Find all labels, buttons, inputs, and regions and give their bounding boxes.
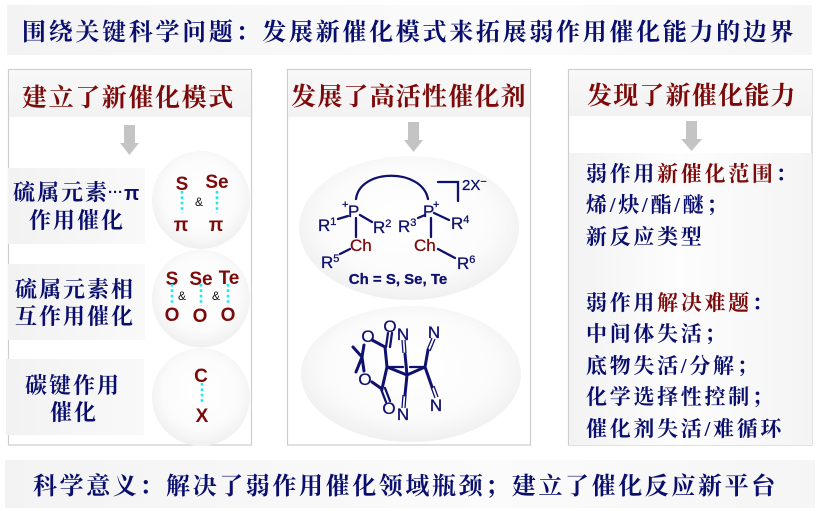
diagram: cyano cyclopropane structure: O <box>382 399 396 418</box>
bottom banner <box>5 460 815 508</box>
row label: chalcogen-pi catalysis: ··· <box>108 184 123 201</box>
text block: capabilities list: 化学选择性控制； <box>586 385 776 409</box>
icon: C X interaction: C <box>194 366 208 387</box>
diagram: phosphonium chalcogenide catalyst: R <box>398 217 410 236</box>
row label: chalcogen-pi catalysis: 作用催化 <box>29 208 125 233</box>
diagram: cyano cyclopropane structure: N <box>428 323 440 342</box>
diagram: cyano cyclopropane structure: N <box>397 405 409 424</box>
row label: chalcogen interaction catalysis <box>8 264 145 340</box>
heading: high activity catalysts <box>288 70 530 117</box>
top banner <box>7 5 812 55</box>
icon: S and Se pi interaction: & <box>195 195 203 209</box>
text block: capabilities list: 新反应类型 <box>586 225 704 249</box>
diagram: phosphonium chalcogenide catalyst: P <box>348 202 359 221</box>
arrow: right panel <box>681 121 702 151</box>
diagram: phosphonium chalcogenide catalyst: 4 <box>463 214 469 226</box>
row label: chalcogen interaction catalysis: 硫属元素相 <box>15 277 135 302</box>
heading: new catalysis modes: 建立了新催化模式 <box>22 84 235 112</box>
text block: capabilities list: 弱作用新催化范围： <box>586 162 799 186</box>
icon: S Se Te O interaction <box>152 250 250 348</box>
panel: new catalytic capabilities <box>568 70 812 445</box>
icon: S and Se pi interaction <box>152 151 250 249</box>
arrow: left panel <box>120 125 139 155</box>
icon: S Se Te O interaction: S <box>166 269 178 290</box>
icon: C X interaction: X <box>196 406 209 427</box>
diagram: phosphonium chalcogenide catalyst <box>299 156 519 300</box>
top banner: 围绕关键科学问题：发展新催化模式来拓展弱作用催化能力的边界 <box>22 18 796 46</box>
icon: S and Se pi interaction: π <box>174 215 189 236</box>
diagram: phosphonium chalcogenide catalyst: 1 <box>330 216 336 228</box>
diagram: cyano cyclopropane structure <box>301 306 521 442</box>
diagram: cyano cyclopropane structure: O <box>361 327 375 346</box>
diagram: cyano cyclopropane structure: O <box>358 370 372 389</box>
icon: S Se Te O interaction: O <box>221 305 235 326</box>
diagram: phosphonium chalcogenide catalyst: Ch = S, Se, Te <box>349 271 447 288</box>
diagram: phosphonium chalcogenide catalyst: R <box>321 253 333 272</box>
diagram: phosphonium chalcogenide catalyst: 3 <box>410 217 416 229</box>
text block: capabilities list: 催化剂失活/难循环 <box>586 417 784 441</box>
heading: new catalytic capabilities <box>569 70 812 116</box>
diagram: phosphonium chalcogenide catalyst: 5 <box>333 253 339 265</box>
text block: capabilities list: 弱作用解决难题： <box>586 291 776 315</box>
panel: high activity catalysts <box>288 70 530 445</box>
text block: capabilities list: 烯/炔/酯/醚； <box>585 193 730 217</box>
row label: carbon bond catalysis: 碳键作用 <box>25 373 121 398</box>
diagram: phosphonium chalcogenide catalyst: + <box>433 199 439 211</box>
diagram: phosphonium chalcogenide catalyst: 6 <box>469 254 475 266</box>
row label: chalcogen interaction catalysis: 互作用催化 <box>15 304 135 329</box>
icon: S and Se pi interaction: Se <box>205 172 229 193</box>
text block: capabilities list <box>569 153 812 445</box>
diagram: phosphonium chalcogenide catalyst: Ch <box>414 236 436 255</box>
text block: capabilities list: 中间体失活； <box>586 322 728 346</box>
icon: S Se Te O interaction: O <box>193 306 207 327</box>
diagram: phosphonium chalcogenide catalyst: Ch <box>350 236 372 255</box>
diagram: phosphonium chalcogenide catalyst: R <box>457 254 469 273</box>
arrow: middle panel <box>404 122 423 152</box>
row label: chalcogen-pi catalysis: π <box>124 183 141 205</box>
icon: S Se Te O interaction: Se <box>189 269 213 290</box>
row label: chalcogen-pi catalysis <box>8 168 145 244</box>
text block: capabilities list: 底物失活/分解； <box>586 354 760 378</box>
panel: new catalysis modes <box>6 70 252 446</box>
row label: carbon bond catalysis: 催化 <box>50 400 98 425</box>
diagram: phosphonium chalcogenide catalyst: R <box>318 216 330 235</box>
row label: chalcogen-pi catalysis: 硫属元素 <box>13 180 109 205</box>
bottom banner: 科学意义：解决了弱作用催化领域瓶颈；建立了催化反应新平台 <box>33 472 778 500</box>
icon: S Se Te O interaction: & <box>178 289 186 303</box>
diagram: cyano cyclopropane structure: N <box>397 325 409 344</box>
diagram: phosphonium chalcogenide catalyst: 2X <box>462 177 480 194</box>
icon: S and Se pi interaction: π <box>209 215 224 236</box>
row label: carbon bond catalysis <box>6 359 144 435</box>
diagram: phosphonium chalcogenide catalyst: − <box>480 176 487 188</box>
icon: S Se Te O interaction: O <box>165 305 179 326</box>
diagram: phosphonium chalcogenide catalyst: R <box>373 218 385 237</box>
diagram: phosphonium chalcogenide catalyst: P <box>423 202 434 221</box>
diagram: cyano cyclopropane structure: O <box>383 317 397 336</box>
heading: high activity catalysts: 发展了高活性催化剂 <box>291 82 527 111</box>
diagram: cyano cyclopropane structure: N <box>430 396 442 415</box>
heading: new catalysis modes <box>9 70 251 117</box>
diagram: phosphonium chalcogenide catalyst: + <box>342 199 348 211</box>
diagram: phosphonium chalcogenide catalyst: 2 <box>385 218 391 230</box>
icon: S Se Te O interaction: & <box>212 289 220 303</box>
heading: new catalytic capabilities: 发现了新催化能力 <box>587 82 797 110</box>
icon: S Se Te O interaction: Te <box>219 268 239 289</box>
icon: S and Se pi interaction: S <box>176 174 188 195</box>
icon: C X interaction <box>152 348 250 446</box>
diagram: phosphonium chalcogenide catalyst: R <box>451 214 463 233</box>
